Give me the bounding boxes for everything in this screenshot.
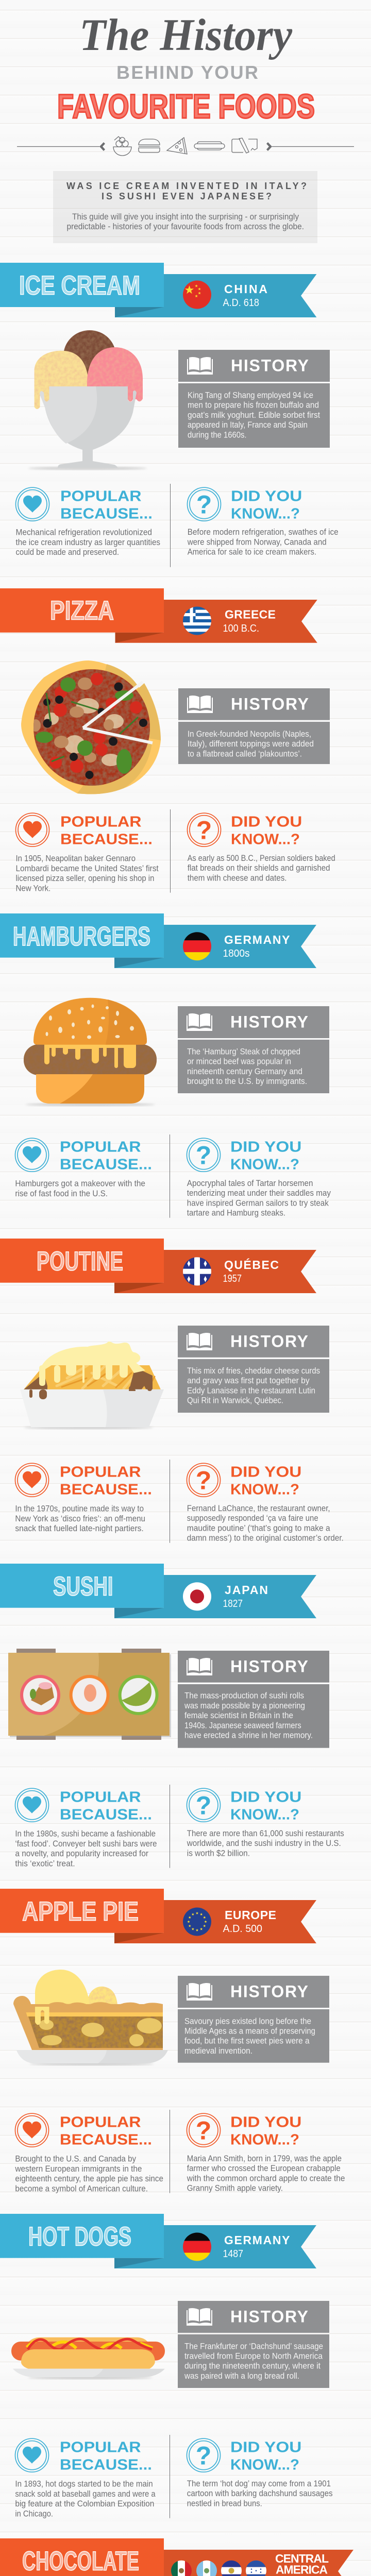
panel: popular and did you know: ?: [196, 816, 212, 845]
panel: popular and did you know: DID YOU: [230, 2114, 301, 2131]
banner: chocolate: CENTRAL: [275, 2552, 329, 2565]
panel: popular and did you know: BECAUSE...: [60, 2457, 152, 2473]
panel: popular and did you know: In 1905, Neapolitan baker Gennaro: [15, 854, 136, 863]
panel: history: HISTORY: [230, 1332, 308, 1351]
panel: popular and did you know: big feature at the Colombian Exposition: [15, 2499, 154, 2509]
panel: popular and did you know: DID YOU: [231, 814, 302, 831]
intro panel: IS SUSHI EVEN JAPANESE?: [102, 191, 272, 201]
illustration: pizza: [21, 660, 161, 794]
panel: popular and did you know: nestled in bread buns.: [187, 2499, 262, 2508]
panel: popular and did you know: Apocryphal tales of Tartar horsemen: [187, 1179, 313, 1188]
banner: hamburgers: GERMANY: [224, 933, 290, 946]
panel: history: food, but the first sweet pies were a: [184, 2037, 310, 2046]
illustration: poutine: [20, 1342, 164, 1429]
intro panel: predictable - histories of your favourite foods from across the globe.: [67, 222, 304, 231]
panel: popular and did you know: were shipped from Norway, Canada and: [187, 537, 327, 547]
illustration: hamburger: [24, 998, 157, 1106]
panel: popular and did you know: have inspired German sailors to try steak: [187, 1198, 329, 1208]
panel: popular and did you know: KNOW...?: [230, 1482, 299, 1498]
panel: popular and did you know: BECAUSE...: [60, 506, 153, 522]
panel: history: to a flatbread called ‘plakountos’.: [188, 749, 302, 758]
banner: pizza: [0, 588, 317, 643]
panel: popular and did you know: licensed pizza seller, opening his shop in: [15, 874, 154, 883]
panel: popular and did you know: ?: [196, 2442, 211, 2470]
panel: popular and did you know: KNOW...?: [230, 2132, 299, 2148]
banner: ice cream: [0, 263, 316, 317]
panel: popular and did you know: POPULAR: [60, 1464, 141, 1481]
panel: popular and did you know: worldwide, and the sushi industry in the U.S.: [187, 1839, 341, 1848]
panel: history: Qui Rit in Warwick, Québec.: [187, 1396, 283, 1405]
illustration: sushi board: [8, 1649, 171, 1740]
panel: history: appeared in Italy, France and Spain: [188, 420, 308, 430]
banner: ice cream: A.D. 618: [223, 297, 259, 309]
panel: popular and did you know: [15, 1460, 344, 1543]
panel: popular and did you know: Brought to the U.S. and Canada by: [15, 2155, 137, 2164]
section: hamburgers: [0, 913, 331, 1218]
panel: history: travelled from Europe to North America: [184, 2351, 323, 2361]
banner: hot dogs: 1487: [223, 2248, 243, 2260]
panel: popular and did you know: is worth $2 billion.: [187, 1849, 250, 1858]
panel: popular and did you know: KNOW...?: [231, 832, 300, 848]
panel: history: The Frankfurter or ‘Dachshund’ sausage: [184, 2342, 323, 2351]
banner: hot dogs: GERMANY: [224, 2233, 290, 2247]
icon row: food icons: [17, 137, 354, 156]
panel: popular and did you know: DID YOU: [231, 488, 302, 505]
banner: poutine: POUTINE: [37, 1247, 123, 1277]
panel: popular and did you know: New York.: [15, 884, 50, 893]
panel: history: during the 1660s.: [188, 430, 246, 439]
panel: history: King Tang of Shang employed 94 ice: [188, 391, 313, 400]
illustration: hot dog: [11, 2337, 165, 2379]
section: sushi: [0, 1564, 344, 1868]
panel: history: [178, 2301, 329, 2388]
banner: sushi: SUSHI: [53, 1572, 113, 1602]
banner: apple pie: [0, 1889, 316, 1943]
panel: popular and did you know: DID YOU: [230, 1464, 301, 1481]
panel: history: [178, 1326, 329, 1413]
panel: popular and did you know: POPULAR: [60, 488, 142, 505]
panel: history: during the nineteenth century, where it: [184, 2362, 321, 2371]
panel: popular and did you know: There are more than 61,000 sushi restaurants: [187, 1829, 344, 1838]
panel: popular and did you know: KNOW...?: [231, 506, 300, 522]
panel: popular and did you know: Fernand LaChance, the restaurant owner,: [187, 1504, 330, 1513]
panel: history: [178, 1976, 329, 2063]
panel: popular and did you know: ?: [196, 1466, 211, 1495]
title: [57, 10, 315, 125]
panel: history: The ‘Hamburg’ Steak of chopped: [187, 1047, 300, 1056]
banner: pizza: PIZZA: [50, 596, 114, 626]
panel: history: have erected a shrine in her memory.: [184, 1731, 313, 1740]
banner: sushi: 1827: [223, 1598, 243, 1609]
intro panel: WAS ICE CREAM INVENTED IN ITALY?: [66, 181, 307, 191]
panel: history: Savoury pies existed long before the: [184, 2016, 311, 2026]
heading: Behind Your: BEHIND YOUR: [116, 62, 258, 83]
illustration: apple pie: [13, 1970, 168, 2065]
banner: hamburgers: [0, 913, 316, 968]
section: pizza: [0, 588, 335, 893]
panel: popular and did you know: tartare and Hamburg steaks.: [187, 1209, 285, 1218]
panel: popular and did you know: ?: [196, 490, 212, 519]
panel: popular and did you know: The term ‘hot dog’ may come from a 1901: [187, 2479, 331, 2488]
section: ice cream: [0, 263, 339, 567]
panel: history: or minced beef was popular in: [187, 1057, 291, 1066]
intro panel: This guide will give you insight into the surprising - or surprisingly: [72, 212, 299, 222]
panel: popular and did you know: POPULAR: [60, 2114, 141, 2131]
panel: popular and did you know: maudite poutine’ (‘that’s going to make a: [187, 1523, 330, 1533]
banner: poutine: 1957: [223, 1273, 242, 1284]
panel: history: HISTORY: [230, 1657, 308, 1676]
banner: sushi: [0, 1564, 316, 1618]
panel: popular and did you know: New York as ‘disco fries’: an off-menu: [15, 1514, 145, 1523]
banner: apple pie: A.D. 500: [223, 1923, 262, 1935]
banner: apple pie: APPLE PIE: [22, 1897, 139, 1927]
panel: popular and did you know: Granny Smith apple variety.: [187, 2184, 283, 2193]
section: apple pie: [0, 1889, 345, 2193]
panel: popular and did you know: [15, 1134, 331, 1218]
banner: pizza: 100 B.C.: [223, 623, 259, 634]
panel: popular and did you know: KNOW...?: [230, 1157, 299, 1173]
panel: popular and did you know: BECAUSE...: [60, 1807, 152, 1823]
panel: popular and did you know: [14, 2110, 345, 2193]
banner: ice cream: CHINA: [224, 282, 267, 296]
panel: popular and did you know: BECAUSE...: [60, 1482, 152, 1498]
panel: history: female scientist in Britain in the: [184, 1711, 293, 1720]
panel: history: 1940s. Japanese seaweed farmers: [184, 1721, 301, 1730]
panel: popular and did you know: DID YOU: [230, 1139, 301, 1156]
panel: history: In Greek-founded Neopolis (Naples,: [188, 730, 311, 739]
banner: chocolate: [0, 2538, 353, 2576]
panel: popular and did you know: cartoon with barking dachshund sausages: [187, 2489, 333, 2498]
panel: popular and did you know: western European immigrants in the: [14, 2164, 142, 2174]
panel: history: [178, 1006, 329, 1093]
panel: popular and did you know: a novelty, and popularity increased for: [15, 1849, 148, 1858]
panel: popular and did you know: In the 1970s, poutine made its way to: [15, 1504, 144, 1514]
banner: hamburgers: 1800s: [223, 948, 249, 959]
panel: history: HISTORY: [230, 1013, 308, 1031]
panel: popular and did you know: Maria Ann Smith, born in 1799, was the apple: [187, 2154, 342, 2163]
panel: popular and did you know: tenderizing meat under their saddles may: [187, 1189, 331, 1198]
panel: popular and did you know: supposedly responded ‘ça va faire une: [187, 1514, 318, 1523]
panel: history: brought to the U.S. by immigrants.: [187, 1077, 307, 1086]
panel: history: men to prepare his frozen buffalo and: [188, 401, 319, 410]
panel: popular and did you know: with the common orchard apple to create the: [187, 2174, 345, 2183]
section: hot dogs: [0, 2214, 333, 2518]
panel: popular and did you know: this ‘exotic’ treat.: [15, 1859, 75, 1868]
panel: popular and did you know: damn mess’) to the original customer’s order.: [187, 1534, 344, 1543]
panel: popular and did you know: POPULAR: [60, 1789, 141, 1806]
panel: history: was paired with a long bread roll.: [184, 2371, 299, 2381]
banner: chocolate: AMERICA: [276, 2563, 328, 2576]
panel: history: HISTORY: [230, 1982, 308, 2001]
panel: history: nineteenth century Germany and: [187, 1067, 302, 1076]
panel: popular and did you know: POPULAR: [60, 814, 142, 831]
panel: history: [178, 688, 330, 764]
panel: popular and did you know: [15, 2435, 333, 2518]
panel: history: HISTORY: [231, 695, 309, 714]
panel: history: HISTORY: [230, 2308, 308, 2326]
panel: popular and did you know: POPULAR: [60, 1139, 141, 1156]
banner: apple pie: EUROPE: [225, 1908, 276, 1922]
panel: history: [178, 350, 330, 448]
panel: popular and did you know: America for sale to ice cream makers.: [188, 548, 316, 557]
banner: pizza: GREECE: [225, 608, 276, 621]
panel: popular and did you know: BECAUSE...: [60, 1157, 152, 1173]
panel: popular and did you know: Before modern refrigeration, swathes of ice: [188, 528, 339, 537]
panel: popular and did you know: In the 1980s, sushi became a fashionable: [15, 1829, 156, 1839]
panel: popular and did you know: flat breads on their shields and garnished: [188, 863, 330, 873]
panel: popular and did you know: farmer who crossed the European crabapple: [187, 2164, 341, 2173]
panel: history: Middle Ages as a means of preserving: [184, 2027, 315, 2036]
banner: poutine: [0, 1239, 316, 1293]
panel: popular and did you know: DID YOU: [230, 2439, 301, 2456]
panel: popular and did you know: As early as 500 B.C., Persian soldiers baked: [188, 854, 335, 863]
panel: popular and did you know: eighteenth century, the apple pie has since: [15, 2174, 163, 2183]
panel: popular and did you know: [15, 809, 335, 893]
panel: popular and did you know: ?: [196, 1791, 211, 1820]
heading: Favourite Foods: FAVOURITE FOODS: [57, 87, 315, 125]
panel: popular and did you know: KNOW...?: [230, 2457, 299, 2473]
panel: popular and did you know: the ice cream industry as larger quantities: [15, 538, 160, 547]
panel: history: Italy), different toppings were added: [188, 739, 314, 749]
panel: history: medieval invention.: [184, 2046, 252, 2056]
banner: poutine: QUÉBEC: [224, 1258, 279, 1272]
panel: popular and did you know: BECAUSE...: [60, 2132, 152, 2148]
panel: history: HISTORY: [231, 357, 309, 375]
panel: popular and did you know: Lombardi became the United States’ first: [15, 864, 159, 873]
panel: popular and did you know: ?: [196, 2116, 211, 2145]
panel: popular and did you know: Mechanical refrigeration revolutionized: [15, 528, 152, 537]
section: poutine: [0, 1239, 344, 1543]
banner: sushi: JAPAN: [225, 1583, 268, 1597]
panel: popular and did you know: them with cheese and dates.: [188, 873, 286, 883]
panel: history: Eddy Lanaisse in the restaurant Lutin: [187, 1386, 315, 1395]
panel: popular and did you know: KNOW...?: [230, 1807, 299, 1823]
panel: popular and did you know: become a symbol of American culture.: [15, 2184, 148, 2193]
panel: history: was made possible by a pioneering: [184, 1701, 305, 1710]
panel: popular and did you know: rise of fast food in the U.S.: [15, 1189, 108, 1198]
panel: popular and did you know: in Chicago.: [15, 2509, 53, 2518]
intro panel: [53, 171, 317, 243]
panel: popular and did you know: DID YOU: [230, 1789, 301, 1806]
panel: history: This mix of fries, cheddar cheese curds: [187, 1366, 320, 1376]
banner: hot dogs: [0, 2214, 316, 2268]
panel: popular and did you know: [15, 484, 339, 567]
panel: popular and did you know: snack sold at baseball games and were a: [15, 2489, 156, 2499]
section: chocolate: [0, 2538, 353, 2576]
panel: history: and gravy was first put together by: [187, 1376, 310, 1385]
banner: chocolate: CHOCOLATE: [22, 2547, 139, 2576]
panel: popular and did you know: snack that fuelled late-night partiers.: [15, 1524, 144, 1533]
panel: history: goat’s milk yoghurt. Edible sorbet first: [188, 411, 320, 420]
banner: ice cream: ICE CREAM: [19, 271, 140, 301]
illustration: ice cream sundae: [28, 330, 147, 470]
panel: popular and did you know: [15, 1785, 344, 1868]
banner: hot dogs: HOT DOGS: [28, 2222, 131, 2252]
heading: The History: The History: [79, 10, 293, 60]
panel: popular and did you know: POPULAR: [60, 2439, 141, 2456]
panel: popular and did you know: In 1893, hot dogs started to be the main: [15, 2480, 153, 2489]
banner: hamburgers: HAMBURGERS: [13, 922, 150, 952]
panel: popular and did you know: BECAUSE...: [60, 832, 153, 848]
panel: popular and did you know: could be made and preserved.: [15, 548, 119, 557]
panel: history: The mass-production of sushi rolls: [184, 1691, 304, 1701]
panel: popular and did you know: ?: [196, 1141, 211, 1170]
panel: popular and did you know: ‘fast food’. Conveyer belt sushi bars were: [15, 1839, 157, 1849]
panel: history: [178, 1651, 329, 1748]
panel: popular and did you know: Hamburgers got a makeover with the: [15, 1179, 145, 1189]
